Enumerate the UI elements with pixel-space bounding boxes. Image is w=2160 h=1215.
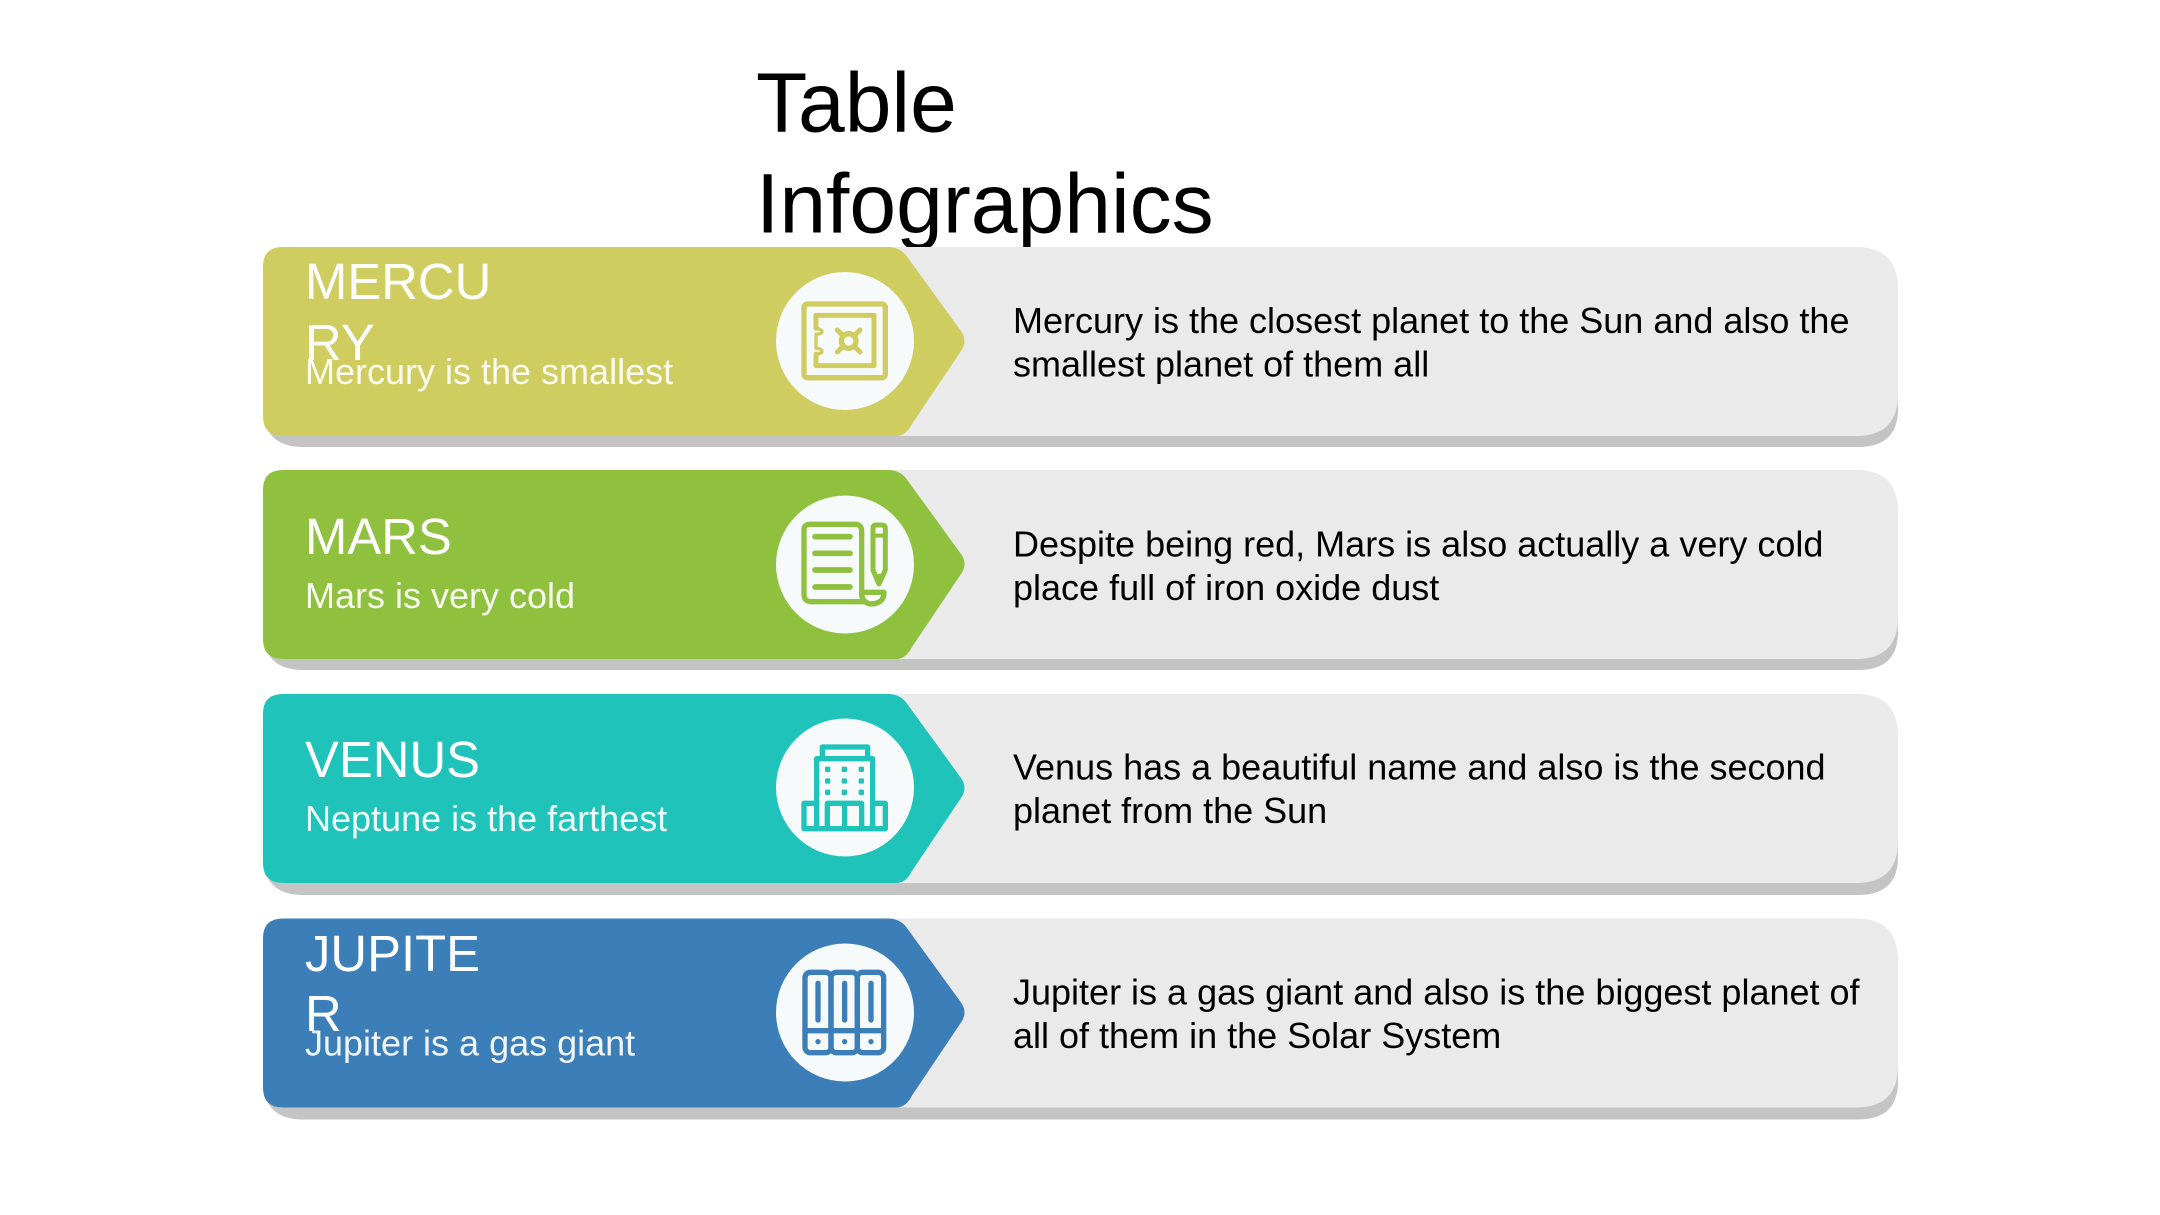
Mars subtitle: Mars is very cold <box>305 575 575 616</box>
Jupiter subtitle: Jupiter is a gas giant <box>305 1022 635 1064</box>
Mercury coloured arrow tab <box>263 247 964 436</box>
Mercury subtitle: Mercury is the smallest <box>305 351 673 392</box>
icon: safe <box>804 304 885 378</box>
icon: office building <box>804 747 885 829</box>
Mars description: Despite being red, Mars is also actually a very cold <box>1013 524 1823 564</box>
Jupiter coloured arrow tab <box>263 918 964 1108</box>
Mars heading: MARS <box>305 508 452 565</box>
icon: binders <box>805 972 884 1053</box>
Mars coloured arrow tab <box>263 470 964 659</box>
title <box>756 56 1214 250</box>
panel: Venus row <box>263 694 1898 895</box>
Jupiter description: all of them in the Solar System <box>1013 1015 1501 1056</box>
panel: Mars row <box>263 470 1898 670</box>
Mercury icon circle <box>776 272 914 410</box>
title: Infographics <box>756 156 1214 250</box>
Mars description: place full of iron oxide dust <box>1013 567 1439 608</box>
title: Table <box>756 56 957 150</box>
panel: Mercury row <box>263 247 1898 447</box>
Jupiter heading: R <box>305 985 342 1042</box>
Mercury description: smallest planet of them all <box>1013 344 1429 384</box>
Venus description: Venus has a beautiful name and also is the second <box>1013 746 1826 788</box>
icon: document and pencil <box>804 524 885 604</box>
panel: Jupiter row <box>263 918 1898 1120</box>
Jupiter icon circle <box>776 944 914 1082</box>
Mercury heading: MERCU <box>305 253 491 310</box>
Mercury heading: RY <box>305 314 375 371</box>
Venus description: planet from the Sun <box>1013 790 1327 831</box>
Jupiter heading: JUPITE <box>305 925 480 982</box>
Mercury description: Mercury is the closest planet to the Sun and also the <box>1013 300 1849 341</box>
Venus coloured arrow tab <box>263 694 964 883</box>
Mars icon circle <box>776 496 914 634</box>
Venus icon circle <box>776 718 914 856</box>
Jupiter description: Jupiter is a gas giant and also is the biggest planet of <box>1013 972 1861 1012</box>
Venus subtitle: Neptune is the farthest <box>305 798 667 839</box>
Venus heading: VENUS <box>305 731 480 788</box>
